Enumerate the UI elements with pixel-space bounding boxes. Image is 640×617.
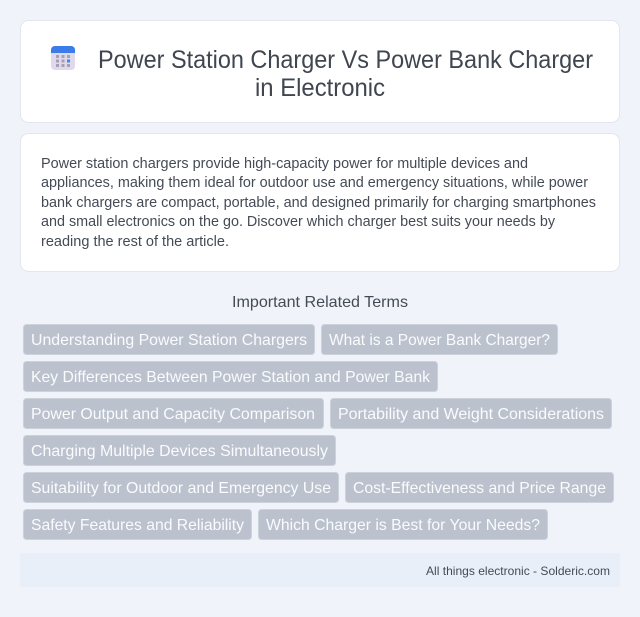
tag: Safety Features and Reliability <box>31 517 244 534</box>
title <box>98 46 593 102</box>
text block: description: Power station chargers provide high-capacity power for multiple devices and <box>41 156 528 172</box>
icon: calendar grid <box>51 46 75 70</box>
tag: Power Output and Capacity Comparison <box>31 406 315 423</box>
footer <box>20 553 620 587</box>
tag <box>24 436 336 466</box>
tag: Understanding Power Station Chargers <box>31 332 307 349</box>
tag: Which Charger is Best for Your Needs? <box>266 517 540 534</box>
tag: Cost-Effectiveness and Price Range <box>353 480 606 497</box>
text block: description: bank chargers are compact, portable, and designed primarily for charging smartphones <box>41 195 596 211</box>
tag <box>24 362 438 392</box>
tag <box>24 398 324 428</box>
panel: description <box>20 134 620 272</box>
tag list <box>24 324 614 540</box>
tag <box>322 324 558 354</box>
tag <box>24 510 252 540</box>
tag: Key Differences Between Power Station and Power Bank <box>31 369 431 386</box>
text block: description: appliances, making them ideal for outdoor use and emergency situations, while power <box>41 175 588 191</box>
tag <box>330 398 612 428</box>
footer: All things electronic - Solderic.com <box>426 564 610 578</box>
heading: important related terms: Important Related Terms <box>232 294 408 311</box>
tag <box>346 472 614 502</box>
tag <box>24 324 314 354</box>
tag <box>24 472 338 502</box>
tag <box>258 510 548 540</box>
text block: description: reading the rest of the article. <box>41 234 229 250</box>
text block: description <box>41 156 596 250</box>
header panel <box>20 20 620 122</box>
title: Power Station Charger Vs Power Bank Charger <box>98 46 593 74</box>
text block: description: and small electronics on the go. Discover which charger best suits your needs by <box>41 214 556 230</box>
tag: Charging Multiple Devices Simultaneously <box>31 443 328 460</box>
tag: Suitability for Outdoor and Emergency Use <box>31 480 331 497</box>
tag: What is a Power Bank Charger? <box>329 332 550 349</box>
tag: Portability and Weight Considerations <box>338 406 604 423</box>
title: in Electronic <box>255 74 385 102</box>
